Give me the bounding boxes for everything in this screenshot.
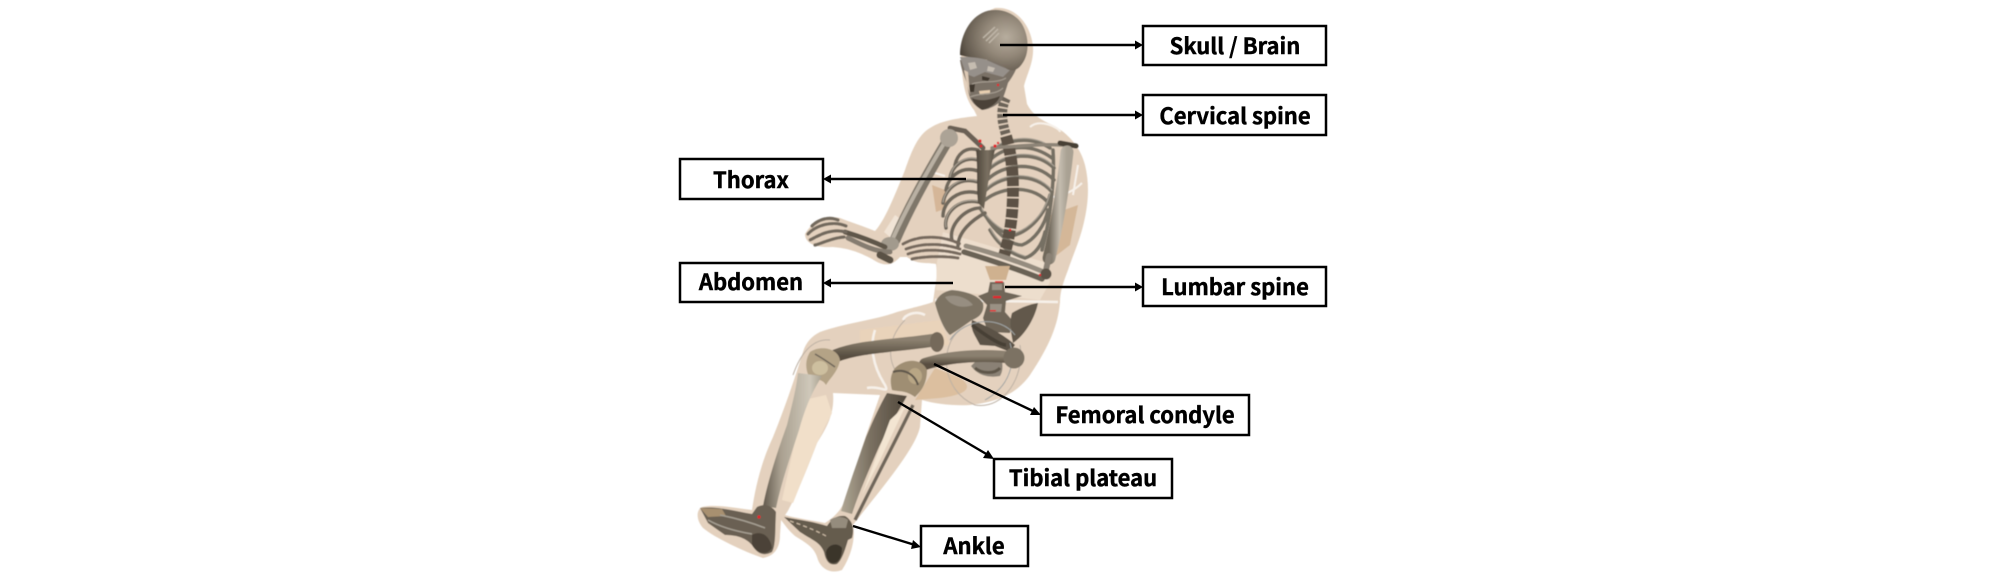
left arm (viewer left)	[808, 129, 958, 260]
human body model with skeleton	[698, 8, 1088, 572]
skull cap	[960, 10, 1028, 70]
left-side ribs	[943, 149, 985, 246]
label: Ankle	[921, 526, 1028, 566]
label: Femoral condyle	[1041, 395, 1249, 435]
label: Abdomen: Abdomen	[698, 265, 803, 297]
label: Femoral condyle: Femoral condyle	[1055, 398, 1235, 430]
right arm (viewer right)	[903, 152, 1067, 280]
left knee	[806, 348, 840, 385]
sternum	[976, 150, 995, 209]
lighter torso, leg and thigh shading	[936, 232, 1050, 300]
right tibia and fibula	[841, 393, 913, 520]
right knee	[891, 361, 927, 397]
femur: left leg	[835, 332, 944, 356]
label: Tibial plateau: Tibial plateau	[1009, 461, 1157, 493]
label: Cervical spine: Cervical spine	[1159, 99, 1311, 131]
skull face and jaw	[960, 57, 1017, 110]
right-side ribs	[980, 140, 1054, 258]
arrow: skull to label	[1000, 40, 1143, 50]
label: Ankle: Ankle	[942, 529, 1005, 561]
label: Thorax	[680, 159, 823, 199]
red marker points	[978, 84, 1041, 311]
arrow: abdomen to label	[823, 278, 953, 288]
translucent body silhouette	[698, 8, 1088, 572]
label: Abdomen	[680, 263, 823, 302]
arrow: thorax to label	[823, 174, 966, 184]
label: Tibial plateau	[994, 459, 1172, 498]
label: Skull / Brain: Skull / Brain	[1170, 29, 1300, 61]
arrow: ankle to label	[853, 526, 921, 549]
lumbar vertebrae and sacrum	[978, 266, 1022, 333]
clavicles	[950, 128, 1076, 148]
left foot bones	[700, 505, 776, 554]
arrow: cervical spine to label	[1003, 110, 1143, 120]
label: Cervical spine	[1143, 95, 1326, 135]
arrow: tibial plateau to label	[898, 402, 994, 459]
neck vertebrae	[1002, 98, 1006, 135]
label: Thorax: Thorax	[713, 163, 789, 195]
label: Lumbar spine: Lumbar spine	[1161, 270, 1309, 302]
arrow: lumbar spine to label	[1005, 282, 1143, 292]
left tibia	[763, 373, 822, 508]
thoracic spine	[1004, 136, 1013, 256]
label: Skull / Brain	[1143, 26, 1326, 65]
pelvis	[935, 290, 1038, 400]
femur: right leg	[925, 348, 1024, 368]
arrow: femoral condyle to label	[934, 364, 1041, 415]
right foot bones	[784, 516, 853, 564]
ribcage	[943, 138, 1054, 258]
label: Lumbar spine	[1143, 267, 1326, 306]
